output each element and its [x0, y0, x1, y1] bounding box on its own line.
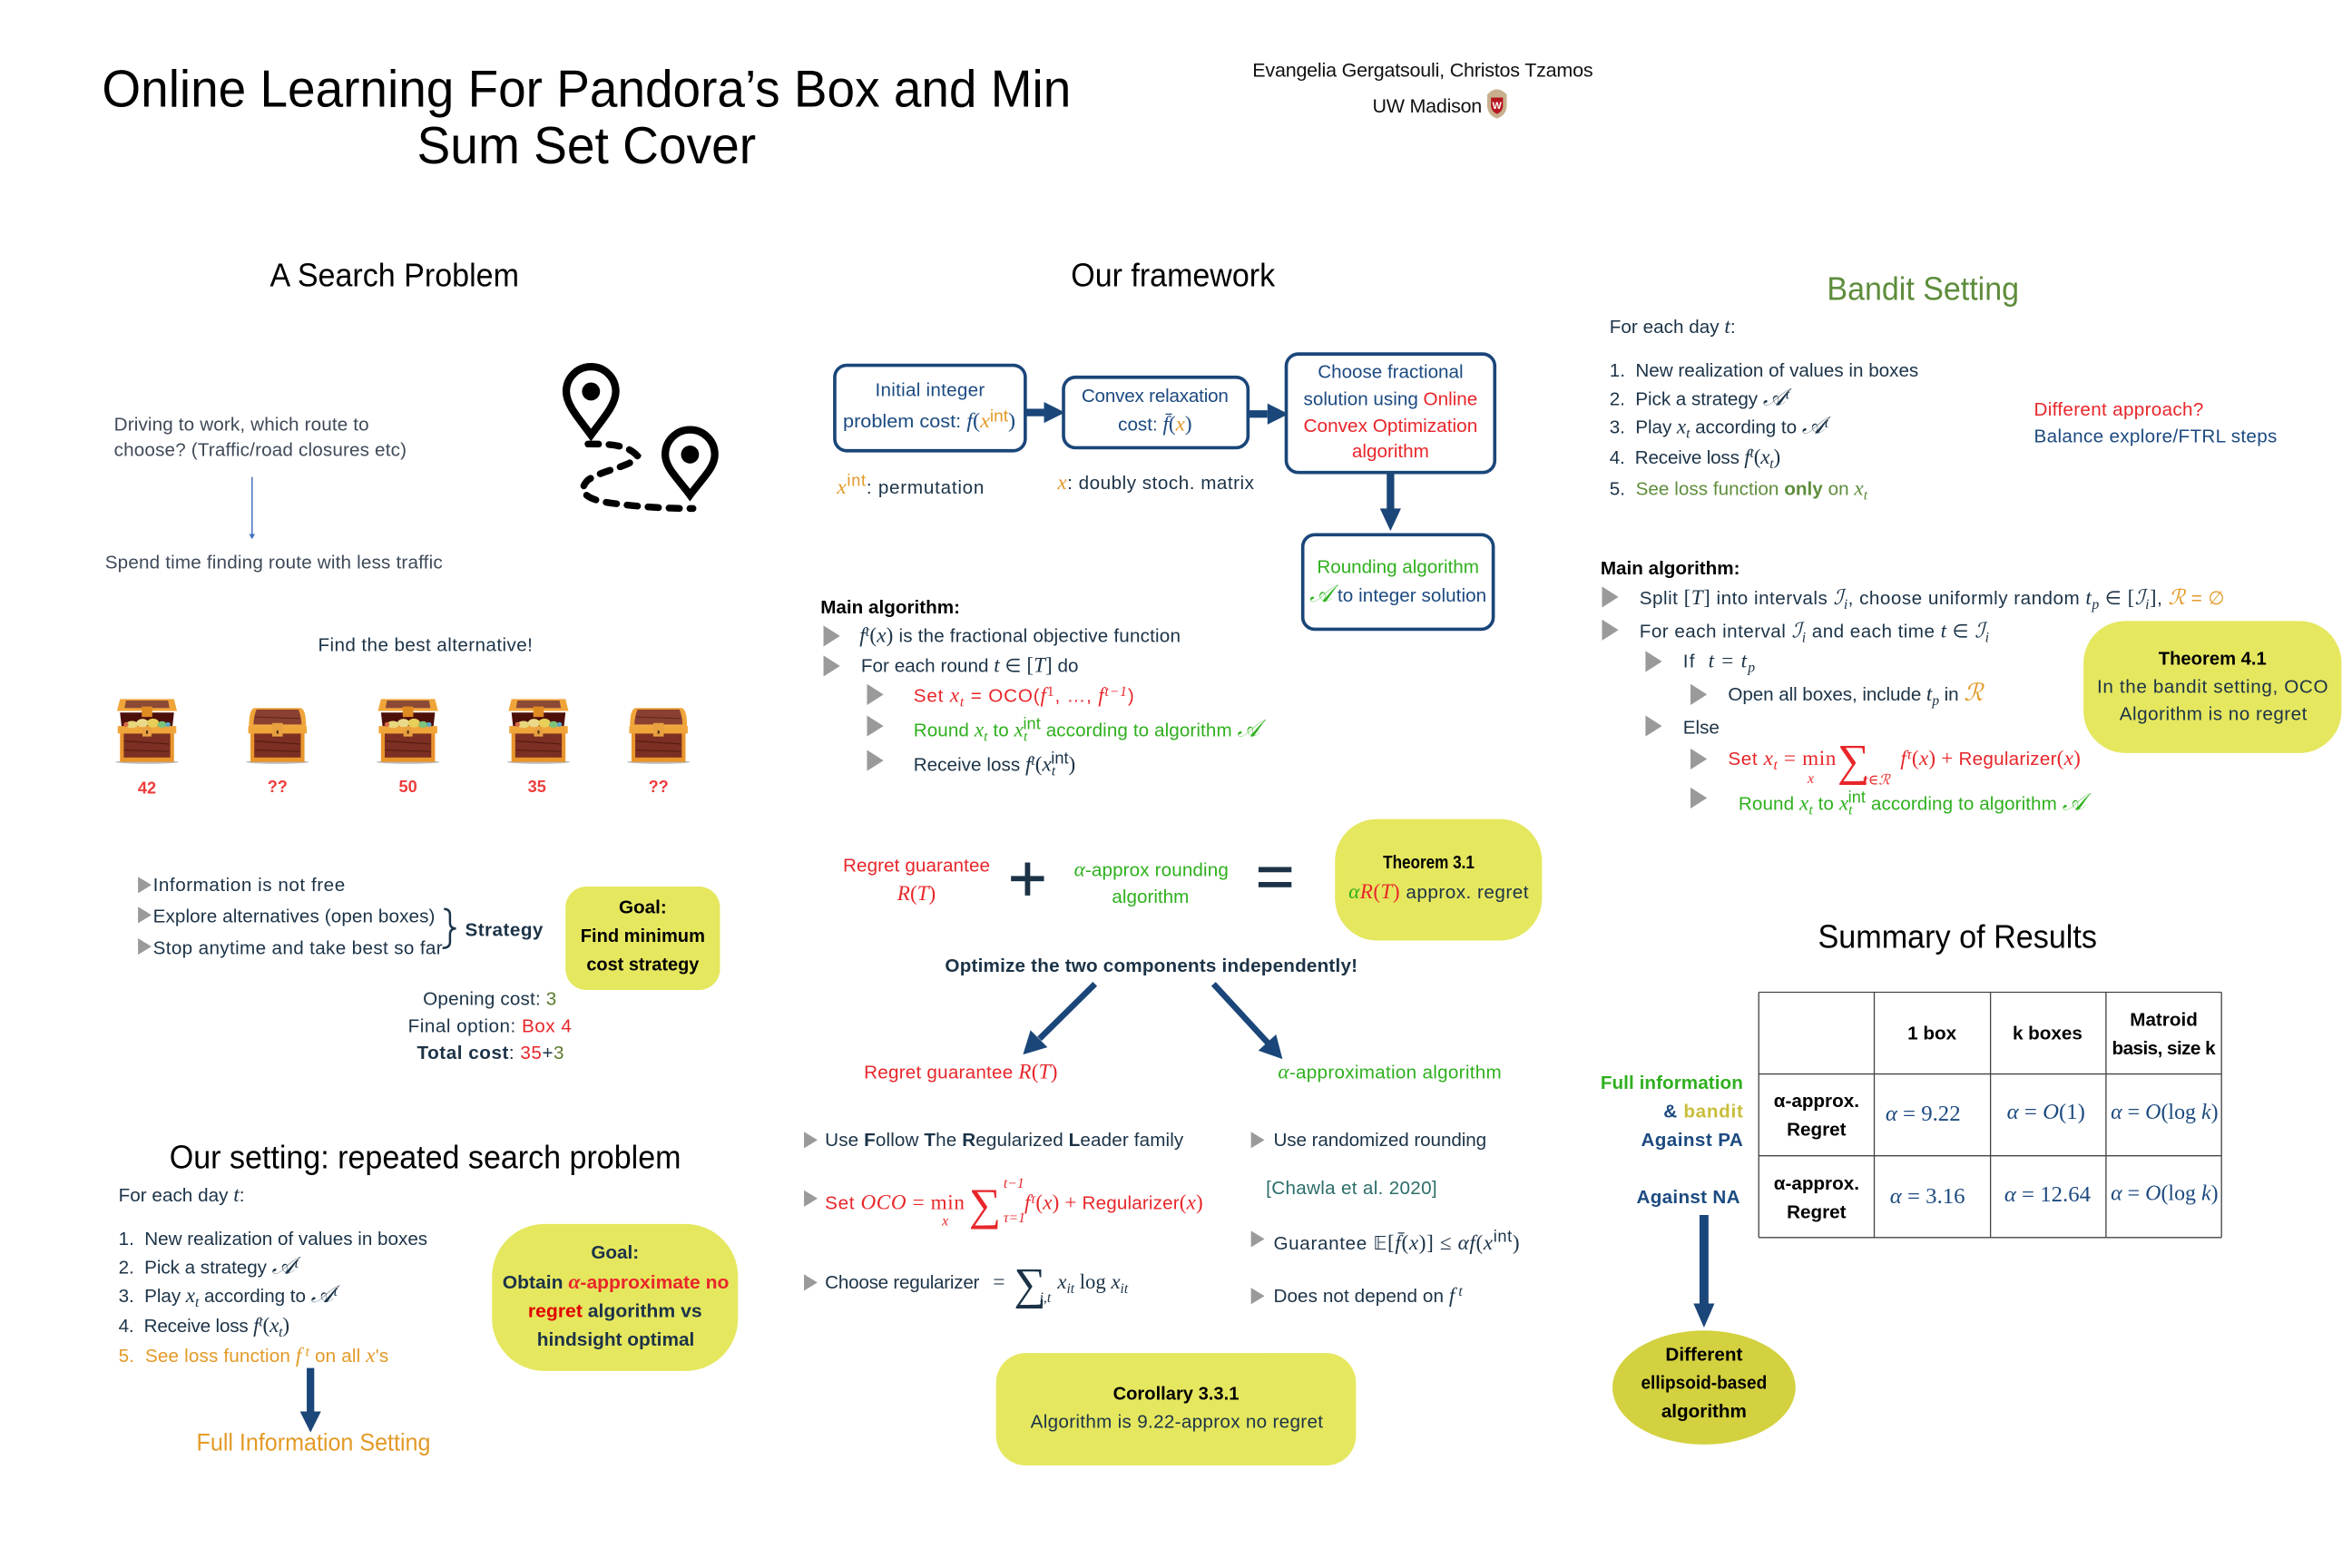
box value labels: 50 [399, 778, 417, 796]
numbered steps: 1. New realization of values in boxes [1610, 360, 1918, 381]
main algorithm bandit: ∑ [1838, 736, 1869, 786]
column: regret guarantee: x [1110, 1270, 1121, 1294]
strategy bullet list: Information is not free [153, 875, 345, 896]
main algorithm bandit: t [2085, 586, 2092, 610]
numbered steps: t [1786, 387, 1790, 403]
results table: α = 12.64 [2004, 1182, 2091, 1207]
arrow: down right [1213, 984, 1282, 1059]
column: alpha approximation: Does not depend on f [1273, 1284, 1455, 1308]
column: regret guarantee: = [993, 1270, 1004, 1294]
main algorithm bandit: i [1802, 631, 1806, 646]
callout: theorem 3.1: Theorem 3.1 [1383, 852, 1475, 873]
column: regret guarantee: Regret guarantee R(T) [864, 1061, 1057, 1084]
numbered steps: t [334, 1284, 338, 1299]
flow box: initial integer [835, 366, 1025, 451]
panel: bandit setting [1601, 270, 2341, 818]
flow box: choose fractional: Convex Optimization [1304, 416, 1477, 436]
text: driving question [114, 414, 407, 461]
results table: 1 box [1907, 1024, 1957, 1044]
results table [1759, 993, 2221, 1238]
column: regret guarantee: τ [1031, 1191, 1037, 1207]
callout: theorem 4.1: Algorithm is no regret [2120, 703, 2308, 724]
main algorithm: t [960, 695, 965, 710]
main algorithm: Set x [914, 684, 959, 708]
callout: goal minimum cost [565, 887, 720, 990]
column: alpha approximation: t [1455, 1284, 1463, 1299]
column: regret guarantee: t−1 [1004, 1176, 1024, 1191]
callout: theorem 4.1: Theorem 4.1 [2159, 648, 2267, 669]
numbered steps: x [1759, 446, 1770, 469]
callout: goal no regret: Obtain α-approximate no [503, 1270, 729, 1294]
main algorithm: For each round t ∈ [T] do [861, 654, 1079, 678]
main algorithm bandit: Open all boxes, include t [1728, 682, 1932, 706]
flow box: initial integer: ) [1008, 409, 1015, 433]
brace and strategy label: Strategy [465, 920, 544, 941]
main algorithm: t−1 [1105, 684, 1127, 700]
text: xint permutation: x [836, 475, 847, 499]
numbered steps: ( [263, 1314, 270, 1338]
column: alpha approximation: Use randomized rounding [1273, 1130, 1486, 1151]
icon: treasure chest closed [246, 708, 309, 764]
authors and affiliation: Evangelia Gergatsouli, Christos Tzamos [1252, 59, 1593, 81]
panel: our setting [119, 1139, 738, 1456]
main algorithm bandit: ] [2150, 586, 2157, 610]
main algorithm: according to algorithm [1041, 720, 1237, 741]
main algorithm: x [1042, 753, 1053, 777]
numbered steps [1610, 360, 1918, 503]
numbered steps: 5. See loss function f [119, 1344, 301, 1367]
main algorithm: ( [1035, 753, 1043, 777]
main algorithm: 1 [1047, 684, 1054, 700]
callout: theorem 3.1 [1335, 819, 1542, 940]
text: alpha approx rounding [1074, 858, 1229, 907]
numbered steps: 3. Play x [119, 1284, 195, 1308]
row labels: Against PA [1641, 1130, 1743, 1151]
flow box: initial integer: problem cost: f(x [843, 409, 989, 433]
flow box: convex relaxation [1063, 377, 1248, 447]
flow box: rounding algorithm: Rounding algorithm [1317, 556, 1479, 577]
numbered steps: according to [1690, 417, 1802, 438]
icon: map route pins [566, 367, 715, 508]
row labels: Full information [1601, 1073, 1743, 1093]
callout: theorem 4.1: In the bandit setting, OCO [2097, 677, 2328, 698]
arrow: down to ellipse [1693, 1215, 1714, 1328]
row labels: Against NA [1636, 1187, 1740, 1208]
main algorithm bandit: Round x [1739, 792, 1808, 816]
column: alpha approximation: α-approximation algorithm [1278, 1061, 1502, 1084]
text: regret guarantee [843, 855, 990, 906]
numbered steps: t [1750, 446, 1755, 461]
column: regret guarantee: ∑ [969, 1180, 1001, 1230]
main algorithm bandit: int [1848, 788, 1866, 806]
main algorithm: Main algorithm: [820, 597, 960, 618]
main algorithm bandit: i [2145, 597, 2149, 612]
main algorithm bandit: to [1813, 794, 1839, 815]
numbered steps: t [1686, 426, 1690, 442]
main algorithm bandit: Else [1683, 717, 1720, 738]
icon: university crest: W [1493, 101, 1503, 112]
heading: bandit setting: Bandit Setting [1827, 270, 2019, 308]
brace and strategy label [443, 909, 544, 948]
numbered steps: t [259, 1314, 263, 1329]
main algorithm: to [988, 720, 1014, 741]
numbered steps: 𝒜 [1802, 412, 1832, 439]
panel: a search problem [105, 257, 720, 1063]
text: alpha approx rounding: algorithm [1112, 887, 1189, 907]
column: regret guarantee: Choose regularizer [825, 1272, 980, 1293]
callout: theorem 4.1 [2083, 621, 2341, 753]
arrow: box 2 to box 3 [1248, 404, 1289, 425]
main algorithm bandit: x [1807, 771, 1814, 787]
authors and affiliation [1252, 59, 1593, 119]
column: regret guarantee: x) + Regularizer(x) [1043, 1191, 1203, 1214]
main algorithm bandit: τ∈ℛ [1863, 773, 1891, 789]
column: alpha approximation: Guarantee 𝔼[f̄(x)] ≤ αf(x [1273, 1231, 1493, 1255]
column: alpha approximation: int [1494, 1228, 1512, 1246]
main algorithm bandit: ℛ [1964, 679, 1984, 706]
text: spend time: Spend time finding route with less traffic [105, 553, 443, 573]
numbered steps: x's [366, 1344, 388, 1367]
callout: ellipsoid-based algorithm: Different [1665, 1344, 1742, 1365]
results table: α = O(1) [2007, 1100, 2085, 1124]
main algorithm [820, 597, 1268, 779]
flow box: rounding algorithm: 𝒜 to integer solution [1309, 580, 1486, 607]
main algorithm: 𝒜 [1238, 715, 1268, 742]
main algorithm bandit: and each time [1807, 622, 1940, 642]
column: regret guarantee: Use Follow The Regularized Leader family [825, 1130, 1184, 1151]
column: regret guarantee: it [1066, 1281, 1075, 1297]
numbered steps: 3. Play x [1610, 416, 1686, 439]
results table: α = O(log k) [2111, 1181, 2219, 1205]
main algorithm bandit: t [1848, 803, 1853, 818]
callout: theorem 3.1: αR(T) approx. regret [1348, 880, 1529, 904]
column: alpha approximation [1251, 1061, 1520, 1308]
callout: goal minimum cost: cost strategy [586, 955, 700, 975]
text: regret guarantee: Regret guarantee [843, 855, 990, 876]
row labels [1601, 1073, 1743, 1208]
column: regret guarantee: x [1056, 1270, 1067, 1294]
main algorithm: t [984, 730, 988, 745]
column: regret guarantee [804, 1061, 1203, 1309]
main algorithm bandit: , choose uniformly random [1848, 588, 2085, 609]
numbered steps: ) [1773, 446, 1780, 469]
main algorithm: int [1023, 714, 1041, 732]
column: regret guarantee: τ=1 [1004, 1210, 1025, 1226]
numbered steps: t [1864, 487, 1868, 503]
main algorithm: = OCO( [965, 686, 1040, 707]
numbered steps: t [1769, 456, 1774, 472]
main algorithm bandit: according to algorithm [1866, 794, 2063, 815]
plus sign [1011, 863, 1044, 896]
flow box: choose fractional [1287, 354, 1494, 473]
main algorithm bandit: If t = t [1683, 650, 1747, 673]
authors and affiliation: UW Madison [1373, 95, 1482, 117]
main algorithm bandit: p [2091, 597, 2099, 612]
main algorithm: x [1014, 719, 1024, 742]
callout: goal no regret [492, 1224, 738, 1371]
callout: goal no regret: hindsight optimal [537, 1329, 694, 1350]
row labels: & bandit [1663, 1102, 1743, 1122]
callout: ellipsoid-based algorithm: ellipsoid-based [1641, 1373, 1767, 1394]
main algorithm: f [1040, 684, 1049, 708]
results table: Regret [1787, 1201, 1847, 1222]
text: regret guarantee: R(T) [897, 882, 936, 906]
column: regret guarantee: Set OCO = min [825, 1191, 965, 1214]
numbered steps: on all [309, 1346, 366, 1367]
flow box: convex relaxation: Convex relaxation [1082, 386, 1229, 407]
text: different approach [2034, 399, 2277, 447]
numbered steps: 4. Receive loss f [119, 1314, 260, 1338]
main algorithm bandit: τ [1906, 747, 1913, 762]
box value labels: ?? [268, 778, 288, 796]
numbered steps: x [269, 1314, 279, 1338]
text: optimize independently: Optimize the two components independently! [945, 956, 1357, 976]
icon: treasure chest open [377, 699, 439, 764]
main algorithm bandit [1601, 558, 2224, 818]
title [102, 60, 1071, 175]
numbered steps: 2. Pick a strategy 𝒜 [1610, 383, 1786, 410]
numbered steps: 4. Receive loss f [1610, 446, 1750, 469]
text: for each day: For each day t: [119, 1183, 244, 1207]
text: find the best alternative: Find the best alternative! [318, 634, 533, 655]
main algorithm: int [1051, 749, 1069, 767]
column: regret guarantee: i,t [1040, 1290, 1052, 1306]
callout: goal minimum cost: Goal: [619, 897, 667, 918]
box value labels [138, 778, 669, 797]
panel: summary of results [1601, 918, 2221, 1445]
flow box: rounding algorithm [1303, 534, 1494, 629]
results table: α-approx. [1774, 1091, 1859, 1112]
heading: our framework: Our framework [1071, 257, 1276, 294]
heading: summary of results: Summary of Results [1818, 918, 2097, 956]
equals sign [1259, 867, 1291, 887]
arrow: down to full information [300, 1368, 321, 1433]
main algorithm: f [859, 624, 868, 648]
numbered steps: ( [1754, 446, 1760, 469]
main algorithm: Receive loss f [914, 753, 1031, 777]
main algorithm: ) [1069, 753, 1075, 777]
flow box: convex relaxation: cost: f̄(x) [1118, 412, 1192, 436]
callout: corollary 3.3.1: Corollary 3.3.1 [1113, 1383, 1239, 1404]
main algorithm bandit: in [1939, 684, 1964, 705]
main algorithm bandit: f [1900, 747, 1909, 770]
arrow: thin down [249, 477, 255, 539]
numbered steps: according to [199, 1286, 311, 1307]
numbered steps: ) [282, 1314, 289, 1338]
arrow: down left [1023, 984, 1095, 1054]
text: xint permutation: : permutation [867, 477, 984, 498]
main algorithm bandit: x) + Regularizer(x) [1919, 747, 2081, 770]
main algorithm bandit: p [1747, 661, 1755, 676]
main algorithm bandit: ( [1912, 747, 1919, 770]
text: driving question: Driving to work, which route to [114, 414, 369, 435]
column: alpha approximation: [Chawla et al. 2020] [1266, 1178, 1437, 1199]
column: regret guarantee: it [1121, 1281, 1129, 1297]
text: full information setting: Full Information Setting [197, 1429, 430, 1456]
text: x doubly stochastic: x: doubly stoch. matrix [1056, 471, 1255, 495]
heading: a search problem: A Search Problem [270, 257, 519, 294]
main algorithm: t [1031, 753, 1035, 769]
column: regret guarantee: ( [1035, 1191, 1043, 1214]
text: alpha approx rounding: α-approx rounding [1074, 858, 1229, 881]
main algorithm bandit: i [1844, 597, 1847, 612]
callout: corollary 3.3.1: Algorithm is 9.22-approx no regret [1031, 1412, 1323, 1433]
numbered steps: t [302, 1344, 310, 1359]
main algorithm bandit: For each interval ℐ [1640, 620, 1801, 643]
numbered steps: 5. See loss function only on x [1610, 477, 1864, 501]
numbered steps: 1. New realization of values in boxes [119, 1229, 427, 1250]
main algorithm bandit: Split [T] into intervals ℐ [1640, 586, 1843, 610]
main algorithm bandit: i [1985, 631, 1989, 646]
strategy bullet list: Stop anytime and take best so far [153, 937, 443, 958]
main algorithm: ( [869, 624, 877, 648]
main algorithm bandit: 𝒜 [2063, 789, 2092, 816]
text: for each day: For each day t: [1610, 315, 1736, 338]
main algorithm bandit: , ℛ = ∅ [2157, 586, 2224, 610]
callout: ellipsoid-based algorithm: algorithm [1661, 1401, 1747, 1422]
main algorithm bandit: t [1774, 758, 1779, 773]
numbered steps: t [295, 1256, 299, 1271]
icon: treasure chest open [115, 699, 179, 764]
arrow: box 3 to box 4 [1380, 474, 1401, 531]
main algorithm: t [866, 624, 870, 640]
results table: α-approx. [1774, 1173, 1859, 1194]
main algorithm bandit: p [1931, 693, 1939, 709]
panel: our framework [804, 257, 1542, 1465]
icon: treasure chest open [507, 699, 570, 764]
box value labels: ?? [649, 778, 669, 796]
main algorithm: f [1098, 684, 1107, 708]
main algorithm bandit: t ∈ ℐ [1941, 620, 1984, 643]
text: xint permutation: int [847, 472, 866, 490]
text: cost breakdown: Final option: Box 4 [408, 1015, 572, 1036]
title: Sum Set Cover [417, 117, 756, 175]
main algorithm: x) is the fractional objective function [877, 624, 1181, 648]
main algorithm bandit: ∈ [2100, 588, 2127, 609]
flow box: initial integer: int [990, 407, 1008, 426]
main algorithm: ) [1128, 686, 1134, 707]
column: alpha approximation: ) [1513, 1231, 1520, 1255]
main algorithm bandit: Main algorithm: [1601, 558, 1740, 579]
main algorithm bandit: Set x [1728, 747, 1773, 770]
numbered steps: t [195, 1295, 200, 1310]
strategy bullet list: Explore alternatives (open boxes) [153, 906, 435, 927]
icon: treasure chest closed [627, 708, 690, 764]
flow box: choose fractional: solution using Online [1304, 388, 1477, 409]
strategy bullet list [138, 875, 443, 958]
column: regret guarantee: f [1024, 1191, 1034, 1214]
title: Online Learning For Pandora’s Box and Min [102, 60, 1071, 118]
column: regret guarantee: log [1074, 1270, 1111, 1294]
callout: goal no regret: Goal: [591, 1242, 639, 1263]
text: different approach: Balance explore/FTRL steps [2034, 426, 2277, 447]
main algorithm bandit: x [1838, 792, 1849, 816]
heading: our setting: Our setting: repeated search problem [170, 1139, 681, 1176]
callout: ellipsoid-based algorithm [1612, 1330, 1796, 1445]
text: different approach: Different approach? [2034, 399, 2203, 420]
text: cost breakdown: Total cost: 35+3 [417, 1043, 564, 1063]
text: driving question: choose? (Traffic/road closures etc) [114, 440, 407, 461]
results table: basis, size k [2112, 1038, 2216, 1059]
flow box: initial integer: Initial integer [876, 379, 985, 400]
results table: α = 3.16 [1890, 1184, 1965, 1209]
callout: corollary 3.3.1 [996, 1353, 1356, 1465]
flow box: choose fractional: Choose fractional [1318, 362, 1464, 383]
box value labels: 35 [528, 778, 546, 796]
main algorithm bandit: = min [1779, 747, 1837, 770]
text: cost breakdown [408, 989, 572, 1063]
main algorithm: t [1052, 764, 1056, 779]
numbered steps: 2. Pick a strategy 𝒜 [119, 1251, 295, 1279]
main algorithm: , …, [1054, 686, 1097, 707]
main algorithm bandit: t [1808, 803, 1813, 818]
text: cost breakdown: Opening cost: 3 [423, 989, 556, 1010]
results table: k boxes [2013, 1024, 2082, 1044]
numbered steps: t [1825, 416, 1829, 431]
main algorithm: Round x [914, 719, 984, 742]
numbered steps: 𝒜 [311, 1280, 341, 1308]
main algorithm bandit: [ℐ [2128, 586, 2145, 610]
results table: Regret [1787, 1119, 1847, 1140]
callout: goal no regret: regret algorithm vs [528, 1300, 702, 1321]
callout: goal minimum cost: Find minimum [581, 926, 705, 946]
icon: university crest [1487, 89, 1506, 119]
flow box: choose fractional: algorithm [1352, 441, 1429, 462]
box value labels: 42 [138, 779, 156, 797]
arrow: box 1 to box 2 [1026, 402, 1065, 423]
results table: α = O(log k) [2111, 1101, 2219, 1124]
numbered steps: t [279, 1325, 283, 1340]
column: regret guarantee: x [941, 1214, 948, 1230]
numbered steps [119, 1229, 427, 1367]
results table: α = 9.22 [1886, 1102, 1961, 1126]
results table: Matroid [2130, 1010, 2198, 1031]
column: regret guarantee: ∑ [1014, 1259, 1046, 1309]
main algorithm: t [1024, 730, 1028, 745]
